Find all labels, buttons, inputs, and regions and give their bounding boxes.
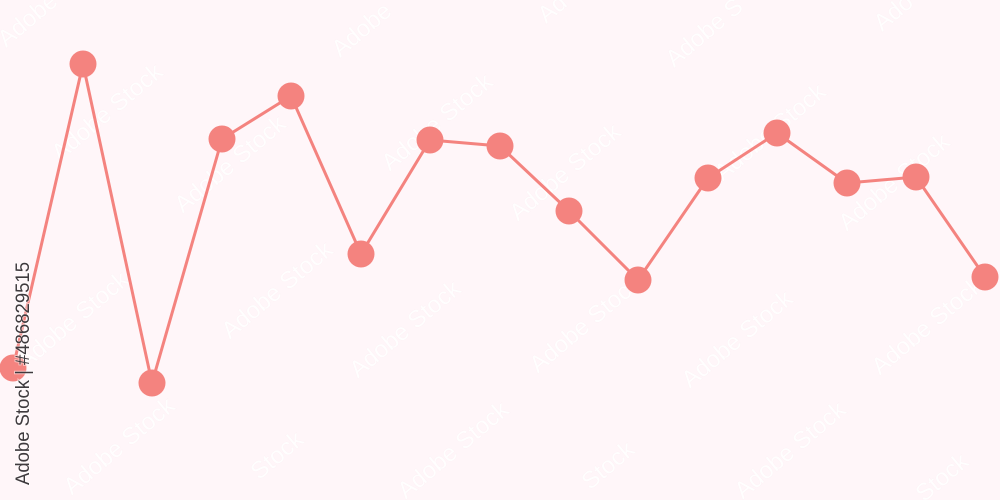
watermark pattern: Adobe Stock: [376, 68, 499, 176]
watermark pattern: Adobe Stock: [676, 285, 799, 393]
watermark pattern: Adobe Stock: [709, 78, 832, 186]
chart line: [13, 64, 985, 383]
watermark pattern: Adobe Stock: [216, 236, 339, 344]
watermark pattern: Adobe Stock: [344, 275, 467, 383]
watermark pattern: Adobe Stock: [58, 392, 181, 500]
line chart: [0, 50, 998, 396]
watermark pattern: Adobe Stock: [833, 128, 956, 236]
watermark pattern: Adobe Stock: [866, 272, 989, 380]
stock image id label: Adobe Stock | #486829515: [13, 262, 34, 485]
watermark pattern: Adobe Stock: [169, 110, 292, 218]
watermark pattern: Stock: [246, 425, 310, 485]
watermark pattern: Adobe Stock: [12, 266, 135, 374]
data points: [0, 50, 998, 396]
watermark pattern: Adobe Stock: [524, 270, 647, 378]
watermark pattern: Stock: [577, 435, 641, 495]
watermark pattern: Adobe Stock: [46, 58, 169, 166]
watermark pattern: Adobe Stock: [504, 118, 627, 226]
